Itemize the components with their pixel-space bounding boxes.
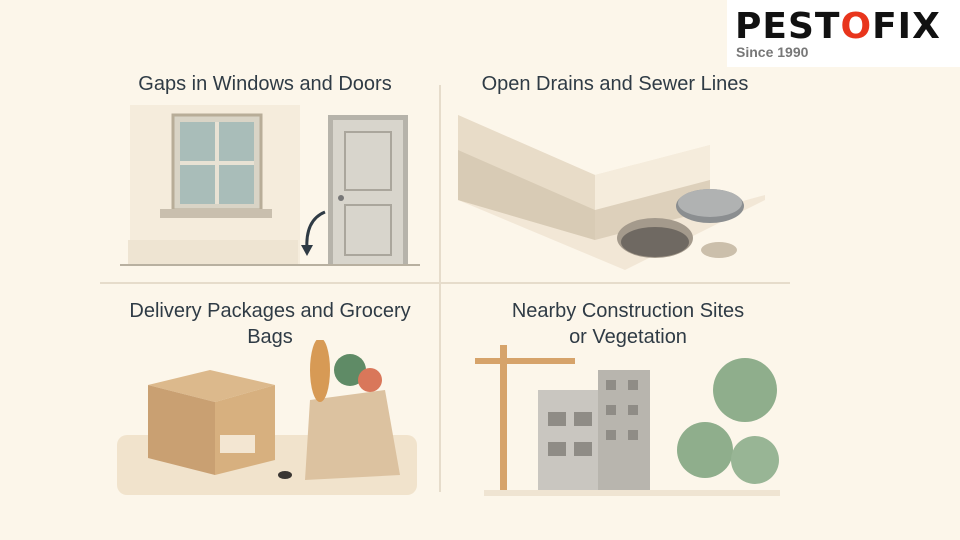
- heading: construction: or Vegetation: [569, 326, 687, 348]
- illustration: packages: [117, 340, 417, 495]
- logo text: PESTOFIX: [735, 6, 941, 47]
- heading: deliveries: Delivery Packages and Grocery: [129, 300, 411, 322]
- illustration: drains: [458, 115, 765, 270]
- heading: windows: Gaps in Windows and Doors: [138, 73, 392, 95]
- heading: construction: Nearby Construction Sites: [512, 300, 744, 322]
- heading: drains: Open Drains and Sewer Lines: [482, 73, 748, 95]
- illustration: construction: [475, 345, 780, 496]
- logo: [727, 0, 960, 67]
- illustration: window and door: [120, 105, 420, 266]
- heading: construction: [512, 300, 744, 348]
- heading: deliveries: [129, 300, 411, 348]
- heading: deliveries: Bags: [247, 326, 293, 348]
- tagline: Since 1990: [736, 44, 808, 60]
